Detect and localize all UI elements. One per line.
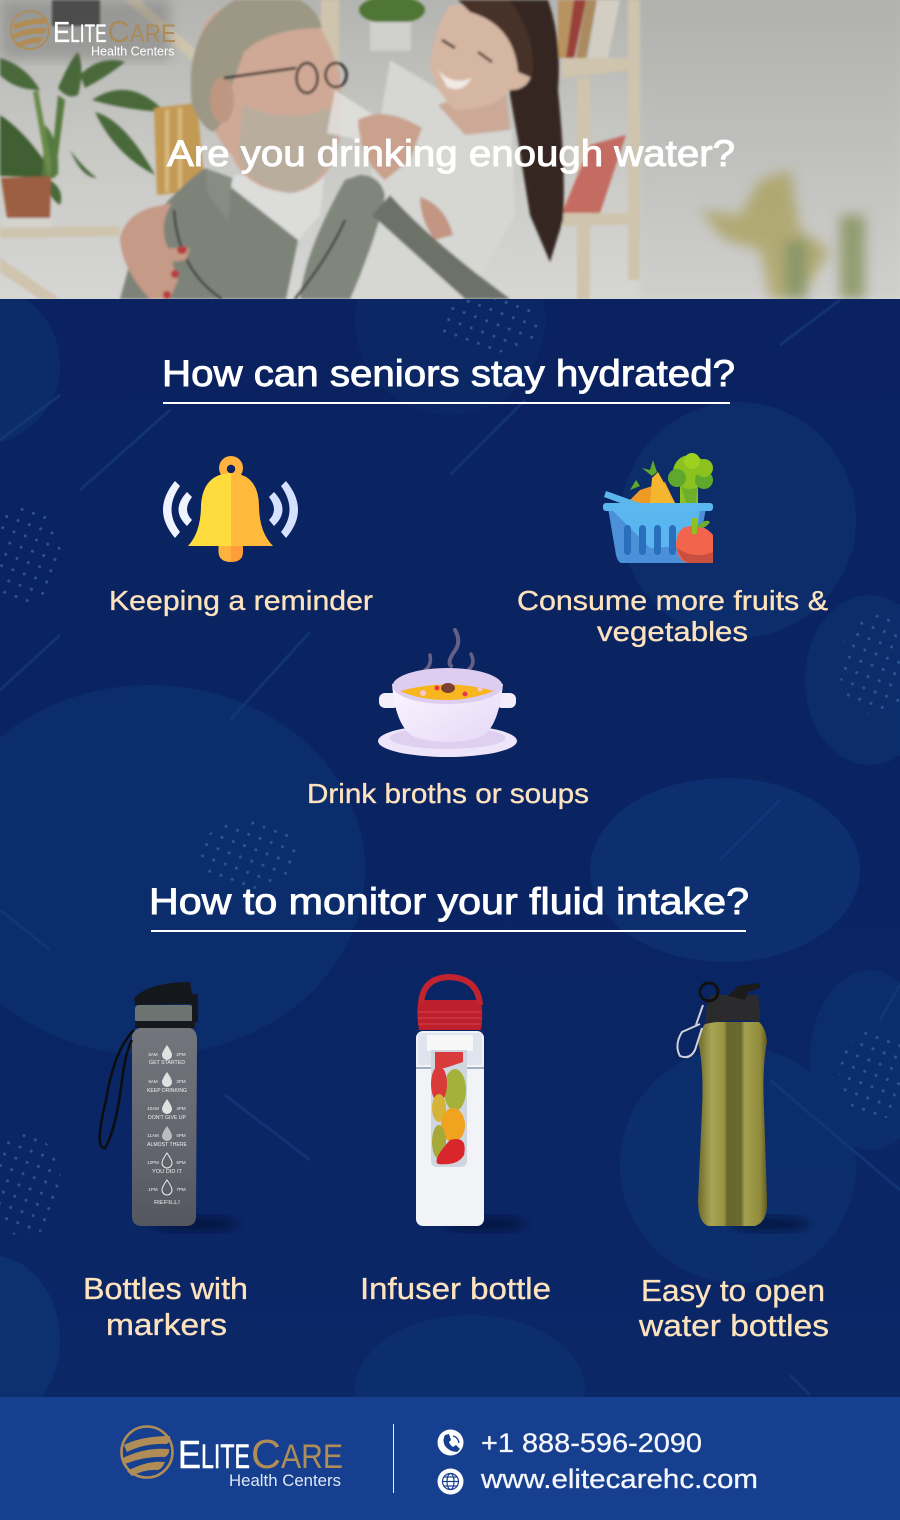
- easy-to-open olive bottle: [677, 983, 808, 1232]
- bottle with time markers: [100, 982, 237, 1232]
- label: infuser bottle: Infuser bottle: [360, 1271, 551, 1306]
- label: fruits and vegetables: vegetables: [597, 616, 748, 647]
- navy content background: [0, 299, 900, 1397]
- footer logo: [122, 1426, 343, 1490]
- red book: [562, 135, 626, 213]
- website: www.elitecarehc.com: [480, 1464, 758, 1494]
- header logo: Health Centers: [91, 44, 174, 58]
- jacket collar strip: [372, 195, 510, 299]
- woman hair ponytail: [500, 0, 564, 262]
- jacket sleeve: [300, 175, 385, 299]
- bottle with time markers: 8AM: [148, 1052, 158, 1057]
- label: bottles with markers: markers: [106, 1307, 227, 1342]
- bottle with time markers: GET STARTED: [149, 1060, 185, 1066]
- icon: basket of fruits and vegetables: [603, 453, 713, 563]
- bottle with time markers: 7PM: [176, 1187, 186, 1192]
- icon: ringing bell: [163, 456, 298, 562]
- books: [558, 0, 574, 58]
- icon: steaming soup bowl: [378, 630, 517, 757]
- bottle with time markers: 5PM: [176, 1133, 186, 1138]
- hand with glass: [358, 114, 422, 180]
- left plant: [0, 52, 165, 205]
- label: easy to open water bottles: water bottles: [638, 1308, 829, 1343]
- bottle with time markers: 4PM: [176, 1106, 186, 1111]
- label: easy to open water bottles: [638, 1273, 829, 1343]
- top plant: [359, 0, 425, 24]
- bottle with time markers: 6PM: [176, 1160, 186, 1165]
- footer logo: ARE: [281, 1438, 343, 1476]
- header logo: [11, 11, 176, 58]
- label: fruits and vegetables: Consume more fruits &: [517, 585, 828, 616]
- jacket main: [120, 168, 298, 299]
- bottle with time markers: 1PM: [148, 1187, 158, 1192]
- heading: monitor fluid intake: How to monitor your fluid intake?: [149, 881, 749, 922]
- footer logo: C: [251, 1431, 281, 1477]
- phone number: +1 888-596-2090: [481, 1428, 702, 1458]
- header logo: LITE: [70, 20, 107, 48]
- bottle with time markers: ALMOST THERE: [147, 1142, 188, 1148]
- chair: [154, 103, 205, 195]
- bottle with time markers: KEEP DRINKING: [147, 1088, 187, 1094]
- bottle with time markers: DON'T GIVE UP: [148, 1115, 187, 1121]
- heading: stay hydrated: How can seniors stay hydrated?: [162, 353, 735, 394]
- woman neck: [438, 94, 511, 136]
- bottle with time markers: REFILL!: [154, 1200, 180, 1206]
- label: easy to open water bottles: Easy to open: [641, 1273, 825, 1308]
- shelves: [0, 0, 640, 299]
- blurred plant right: [700, 170, 865, 299]
- dark vase top: [52, 0, 100, 26]
- infuser bottle: [416, 977, 525, 1232]
- man head: [198, 3, 342, 193]
- bottle with time markers: 3PM: [176, 1079, 186, 1084]
- footer logo: Health Centers: [229, 1471, 341, 1490]
- bottle with time markers: 2PM: [176, 1052, 186, 1057]
- footer logo: E: [178, 1434, 201, 1477]
- footer logo: LITE: [201, 1438, 250, 1476]
- bottle with time markers: 11AM: [147, 1133, 159, 1138]
- hero photo: senior drinking water with caregiver: [0, 0, 900, 299]
- label: bottles with markers: [83, 1271, 248, 1342]
- header logo: ARE: [130, 20, 176, 48]
- glasses: [224, 63, 346, 93]
- hero title: Are you drinking enough water?: [167, 133, 735, 174]
- glass: [327, 90, 378, 140]
- label: broths or soups: Drink broths or soups: [307, 778, 589, 809]
- woman hand on shoulder: [120, 203, 190, 299]
- icon: phone: [438, 1430, 464, 1456]
- footer band: [0, 1397, 900, 1520]
- man neck shirt: [230, 170, 325, 240]
- bottle with time markers: 9AM: [148, 1079, 158, 1084]
- label: keeping a reminder: Keeping a reminder: [109, 585, 373, 616]
- woman shirt: [360, 60, 515, 299]
- hand nails: [163, 246, 187, 299]
- icon: globe: [438, 1468, 464, 1494]
- woman face: [430, 5, 532, 110]
- label: bottles with markers: Bottles with: [83, 1271, 248, 1306]
- bottle with time markers: 12PM: [147, 1160, 159, 1165]
- header logo: E: [53, 17, 70, 49]
- label: fruits and vegetables: [517, 585, 828, 647]
- header logo: C: [107, 15, 130, 49]
- bottle with time markers: 10AM: [147, 1106, 159, 1111]
- bottle with time markers: YOU DID IT: [152, 1169, 182, 1175]
